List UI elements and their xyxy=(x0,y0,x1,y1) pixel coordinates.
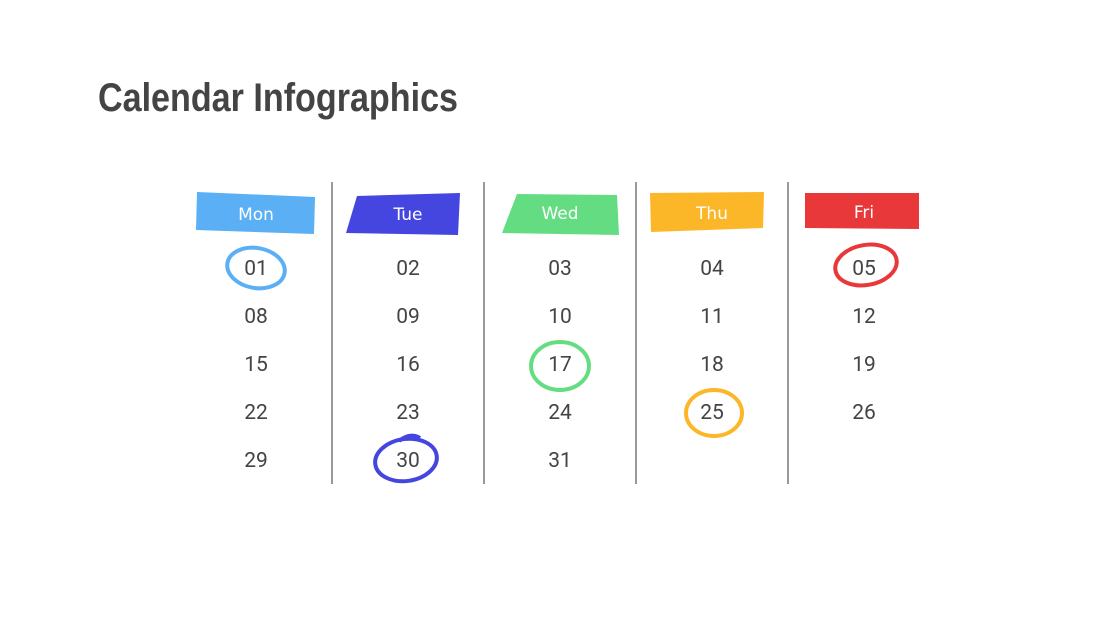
tab: Tue: Tue xyxy=(392,205,423,225)
tab: Tue xyxy=(346,193,460,235)
dates xyxy=(244,257,876,473)
dates: 26 xyxy=(852,401,876,425)
dates: 29 xyxy=(244,449,268,473)
dates: 23 xyxy=(396,401,420,425)
tab: Wed xyxy=(502,194,619,235)
tab: Thu xyxy=(650,192,764,232)
dates: 03 xyxy=(548,257,572,281)
dates: 19 xyxy=(852,353,876,377)
circle: 30 xyxy=(372,435,440,485)
circle: 05 xyxy=(832,240,900,290)
dates: 02 xyxy=(396,257,420,281)
circle: 25 xyxy=(686,390,742,436)
tab: Mon xyxy=(196,192,315,234)
dates: 01 xyxy=(244,257,268,281)
tab: Wed: Wed xyxy=(541,204,579,224)
dates: 25 xyxy=(700,401,724,425)
dates: 12 xyxy=(852,305,876,329)
circle: 01 xyxy=(224,243,288,293)
dates: 22 xyxy=(244,401,268,425)
dates: 31 xyxy=(548,449,572,473)
tab: Fri: Fri xyxy=(854,203,874,223)
dates: 24 xyxy=(548,401,572,425)
dates: 15 xyxy=(244,353,268,377)
dates: 05 xyxy=(852,257,876,281)
tab: Mon: Mon xyxy=(238,205,274,225)
dates: 04 xyxy=(700,257,724,281)
dates: 09 xyxy=(396,305,420,329)
dates: 17 xyxy=(548,353,572,377)
tab: Thu: Thu xyxy=(695,204,728,224)
dates: 30 xyxy=(396,449,420,473)
circle: 17 xyxy=(531,342,589,390)
tab: Fri xyxy=(805,193,919,229)
dates: 18 xyxy=(700,353,724,377)
dates: 08 xyxy=(244,305,268,329)
title: Calendar Infographics xyxy=(98,76,458,120)
dates: 16 xyxy=(396,353,420,377)
dates: 10 xyxy=(548,305,572,329)
dates: 11 xyxy=(700,305,724,329)
